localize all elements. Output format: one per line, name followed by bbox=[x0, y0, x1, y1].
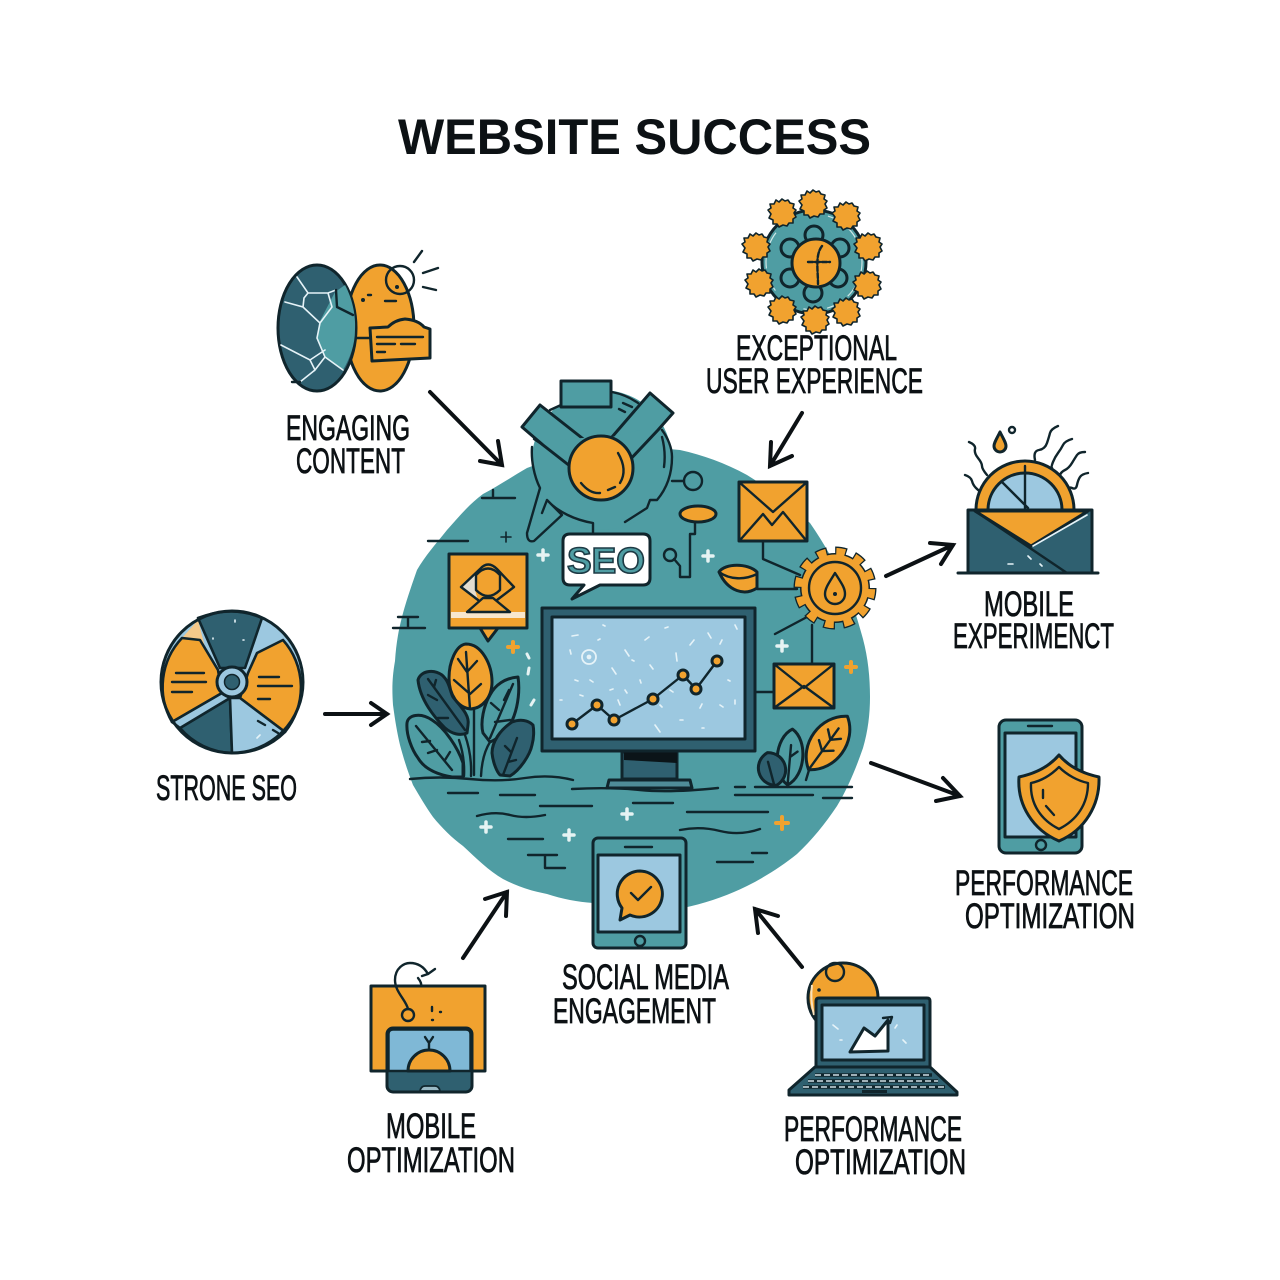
label: performance optimization bottom: PERFORMANCE bbox=[784, 1109, 962, 1149]
label: mobile optimization bbox=[347, 1106, 515, 1180]
label: performance optimization right bbox=[955, 863, 1135, 936]
icon: orange gear with drop bbox=[798, 552, 872, 624]
icon: engaging content bbox=[278, 251, 438, 391]
icon: strong seo wheel bbox=[161, 611, 303, 753]
icon: tablet with check bubble bbox=[593, 838, 686, 948]
label: performance optimization bottom bbox=[784, 1109, 966, 1182]
label: mobile experience: EXPERIMENCT bbox=[953, 616, 1114, 656]
label: mobile experience: MOBILE bbox=[984, 584, 1074, 624]
icon: envelope lower bbox=[774, 664, 834, 708]
decorative ground lines bbox=[393, 490, 852, 868]
label: social media engagement: ENGAGEMENT bbox=[553, 991, 716, 1031]
icon: laptop with graph bbox=[789, 963, 957, 1095]
arrow: engaging content to hub bbox=[430, 392, 502, 465]
panel: central hub illustration bbox=[392, 381, 872, 909]
icon: left plant bbox=[407, 644, 534, 777]
label: engaging content: CONTENT bbox=[296, 441, 405, 481]
icon: monitor with line chart bbox=[542, 608, 755, 788]
arrow: hub to performance bbox=[871, 763, 960, 801]
arrow: laptop to hub bbox=[755, 909, 802, 967]
label: exceptional user experience: EXCEPTIONAL bbox=[736, 328, 897, 368]
arrow: hub to mobile experience bbox=[886, 543, 953, 576]
arrow: strong seo to hub bbox=[325, 703, 387, 725]
icon: profile picture card bbox=[449, 554, 527, 641]
arrow: user experience to hub bbox=[770, 413, 802, 466]
white and orange sparkles bbox=[481, 550, 856, 840]
title: WEBSITE SUCCESS bbox=[398, 109, 871, 165]
speech bubble: SEO: SEO bbox=[567, 540, 645, 581]
icon: envelope top bbox=[739, 482, 807, 541]
arrow: mobile optimization to hub bbox=[463, 892, 507, 958]
label: social media engagement: SOCIAL MEDIA bbox=[562, 957, 729, 997]
label: exceptional user experience: USER EXPERIENCE bbox=[706, 361, 923, 401]
label: engaging content bbox=[286, 408, 410, 481]
label: exceptional user experience bbox=[706, 328, 923, 401]
icon: mobile experience bbox=[958, 426, 1098, 573]
label: social media engagement bbox=[553, 957, 729, 1031]
icon: teal gear with orange ball bbox=[522, 381, 702, 542]
icon: right plant bbox=[755, 706, 861, 789]
icon: exceptional user experience gear bbox=[742, 190, 882, 334]
label: engaging content: ENGAGING bbox=[286, 408, 410, 448]
icon: phone with shield bbox=[999, 720, 1099, 853]
label: mobile optimization: MOBILE bbox=[386, 1106, 476, 1146]
label: strong seo: STRONE SEO bbox=[156, 768, 297, 808]
label: mobile optimization: OPTIMIZATION bbox=[347, 1140, 515, 1180]
speech bubble: SEO bbox=[563, 534, 650, 599]
teal blob background bbox=[392, 448, 870, 909]
label: mobile experience bbox=[953, 584, 1114, 656]
label: performance optimization right: OPTIMIZATION bbox=[965, 896, 1135, 936]
label: performance optimization bottom: OPTIMIZATION bbox=[795, 1142, 966, 1182]
label: performance optimization right: PERFORMANCE bbox=[955, 863, 1133, 903]
icon: mobile optimization bbox=[371, 963, 485, 1092]
screen speckles bbox=[560, 625, 737, 732]
icon: connector nodes bbox=[664, 506, 812, 692]
